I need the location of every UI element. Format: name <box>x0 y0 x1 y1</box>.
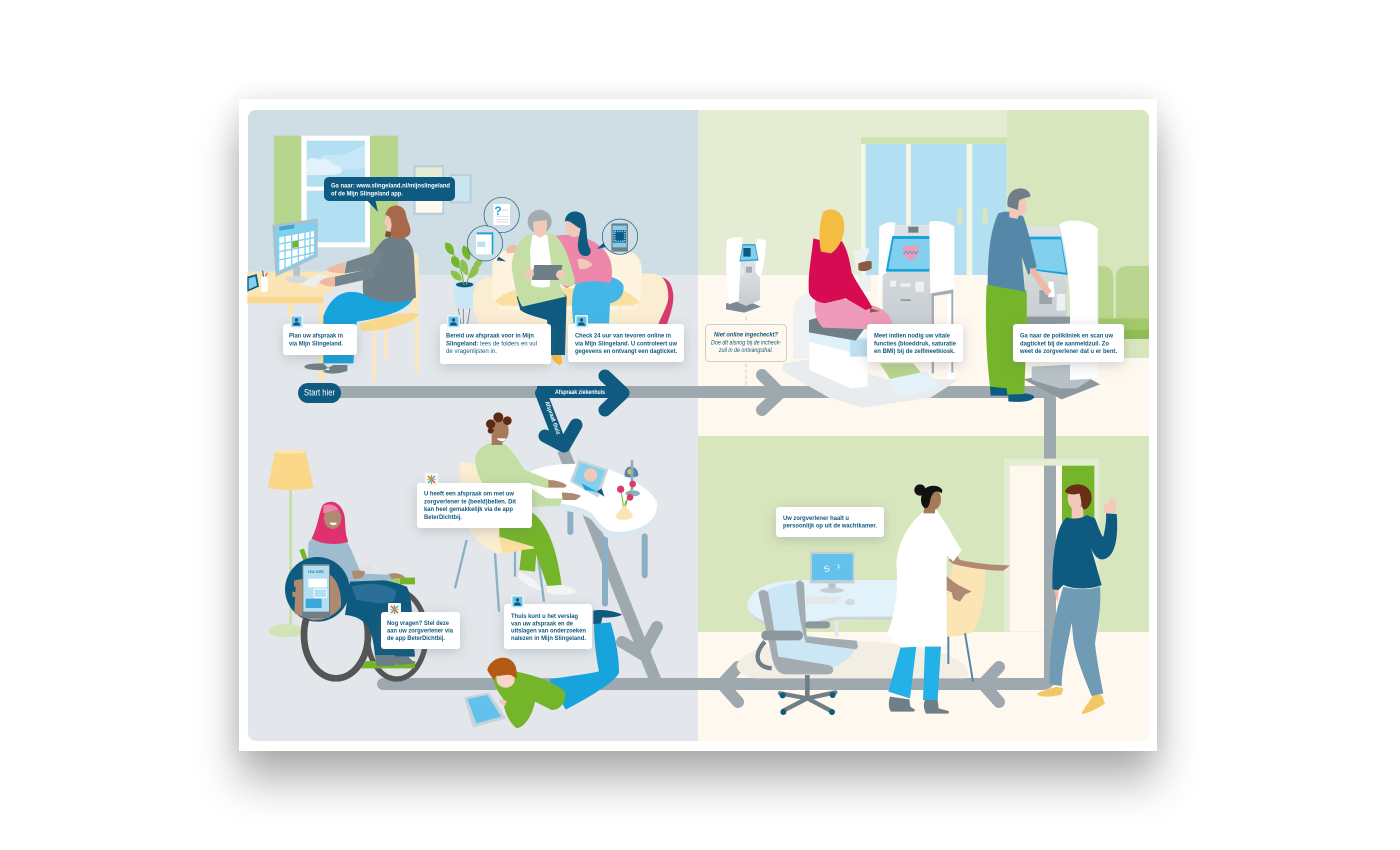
step: read report at home: nalezen in Mijn Slingeland. <box>511 635 586 642</box>
small check-in kiosk <box>726 237 766 313</box>
scene: home video consult <box>268 412 657 728</box>
note: not checked in online: zuil in de ontvangsthal. <box>718 347 773 354</box>
tablet and pen cup <box>247 271 268 292</box>
seated man on video call <box>455 412 581 612</box>
panel backgrounds <box>248 110 1149 741</box>
label: hospital branch: Afspraak ziekenhuis <box>555 390 606 396</box>
phone close-up circle: Uw arts <box>308 569 324 574</box>
infographic <box>247 110 1149 741</box>
scene: window and frames <box>274 136 472 257</box>
step: plan appointment: Plan uw afspraak in <box>289 332 343 340</box>
step: vital functions: functies (bloeddruk, saturatie <box>874 340 956 347</box>
step: plan appointment: via Mijn Slingeland. <box>289 340 343 347</box>
step: prepare appointment: Bereid uw afspraak voor in Mijn <box>446 332 534 340</box>
step: read report at home: van uw afspraak en de <box>511 620 573 627</box>
dashed connector <box>744 317 748 385</box>
waving patient <box>1037 484 1117 714</box>
scene: desk, home planning <box>247 197 673 382</box>
phone close-up circle <box>285 557 350 622</box>
chair <box>359 252 419 382</box>
wheelchair <box>299 549 426 679</box>
step: plan appointment <box>283 315 357 355</box>
note: not checked in online <box>706 324 786 362</box>
office chair <box>758 580 858 715</box>
computer monitor: z <box>836 563 841 571</box>
label: home branch: Afspraak thuis <box>543 400 561 436</box>
step: prepare appointment: de vragenlijsten in. <box>446 348 497 355</box>
speech bubble: website <box>324 177 455 212</box>
person planning appointment <box>304 206 416 374</box>
floor lamp <box>268 450 314 637</box>
house plant <box>445 243 483 325</box>
man at kiosk <box>986 188 1052 402</box>
visitor chair <box>943 562 985 682</box>
young woman with phone <box>507 212 624 323</box>
step: caregiver collects you: persoonlijk op uit de wachtkamer. <box>783 523 877 530</box>
arrow: route chevrons <box>622 375 999 702</box>
speech bubble: website: of de Mijn Slingeland app. <box>331 190 403 197</box>
registration kiosk <box>1023 221 1100 399</box>
woman lying on floor with tablet <box>464 610 622 728</box>
scene: consulting room <box>737 459 1117 715</box>
step: scan day ticket: dagticket bij de aanmeldzuil. Zo <box>1020 340 1109 347</box>
step: read report at home: Thuis kunt u het verslag <box>511 613 578 620</box>
step: video call: U heeft een afspraak om met uw <box>424 490 515 498</box>
route line <box>340 375 1050 702</box>
woman with hijab in wheelchair <box>307 502 415 666</box>
step: online check-in: Check 24 uur van tevoren online in <box>575 332 671 340</box>
step: scan day ticket: weet de zorgverlener dat u er bent. <box>1019 348 1117 355</box>
computer monitor: S <box>822 563 831 575</box>
speech bubble: website: Ga naar: www.slingeland.nl/mijnslingeland <box>331 182 450 190</box>
waiting room seats <box>1098 266 1149 339</box>
thought bubble: folder <box>467 226 506 261</box>
step: video call: BeterDichtbij. <box>424 514 462 521</box>
rug <box>737 640 969 678</box>
doctor's desk <box>747 580 901 637</box>
doctor <box>887 484 1010 714</box>
white poster card with shadow <box>239 99 1157 751</box>
step: video call: zorgverlener te (beeld)bellen. Dit <box>424 498 517 505</box>
step: further questions: Nog vragen? Stel deze <box>387 620 449 627</box>
step: prepare appointment: Slingeland: lees de folders en vul <box>446 340 538 347</box>
step: scan day ticket <box>1013 324 1124 362</box>
round table <box>525 464 657 607</box>
sofa <box>473 250 673 350</box>
thought bubble: question form <box>484 197 519 233</box>
note: not checked in online: Doe dit alsnog bij de incheck- <box>711 339 782 346</box>
computer monitor with calendar <box>272 218 338 287</box>
step: further questions: de app BeterDichtbij. <box>387 635 445 642</box>
computer monitor <box>805 552 855 605</box>
step: caregiver collects you <box>776 507 884 537</box>
scene: hospital hall <box>726 137 1149 408</box>
glass doors <box>861 137 1007 275</box>
desk <box>247 272 350 382</box>
start pill <box>298 383 341 403</box>
step: prepare appointment <box>440 315 551 364</box>
step: further questions: aan uw zorgverlener via <box>387 628 453 635</box>
note: not checked in online: Niet online ingecheckt? <box>714 332 778 338</box>
thought bubble: QR phone <box>597 219 638 254</box>
step: vital functions: en BMI) bij de zelfmeetkiosk. <box>874 348 955 355</box>
step: scan day ticket: Ga naar de polikliniek en scan uw <box>1020 332 1114 340</box>
measuring seat platform <box>782 293 959 408</box>
step: vital functions <box>867 324 963 362</box>
self-measure kiosk <box>878 221 954 380</box>
tablet with doctor on screen <box>570 459 608 498</box>
step: further questions <box>381 603 460 649</box>
step: online check-in: gegevens en ontvangt een dagticket. <box>575 348 677 355</box>
step: vital functions: Meet indien nodig uw vitale <box>874 332 950 340</box>
step: read report at home: uitslagen van onderzoeken <box>511 628 586 635</box>
step: video call <box>417 473 532 528</box>
desk lamp and flowers <box>616 460 640 520</box>
start pill: Start hier <box>304 388 335 398</box>
step: caregiver collects you: Uw zorgverlener haalt u <box>783 515 849 522</box>
step: video call: kan heel gemakkelijk via de app <box>424 506 513 513</box>
dark blue route: hospital and home <box>537 376 623 446</box>
woman on measuring seat <box>809 209 893 329</box>
step: online check-in <box>568 315 684 362</box>
step: online check-in: via Mijn Slingeland. U controleert uw <box>575 340 678 347</box>
step: read report at home <box>504 595 592 649</box>
thought bubble: question form: ? <box>494 204 502 218</box>
older woman with tablet <box>512 210 575 365</box>
door <box>1004 459 1099 684</box>
